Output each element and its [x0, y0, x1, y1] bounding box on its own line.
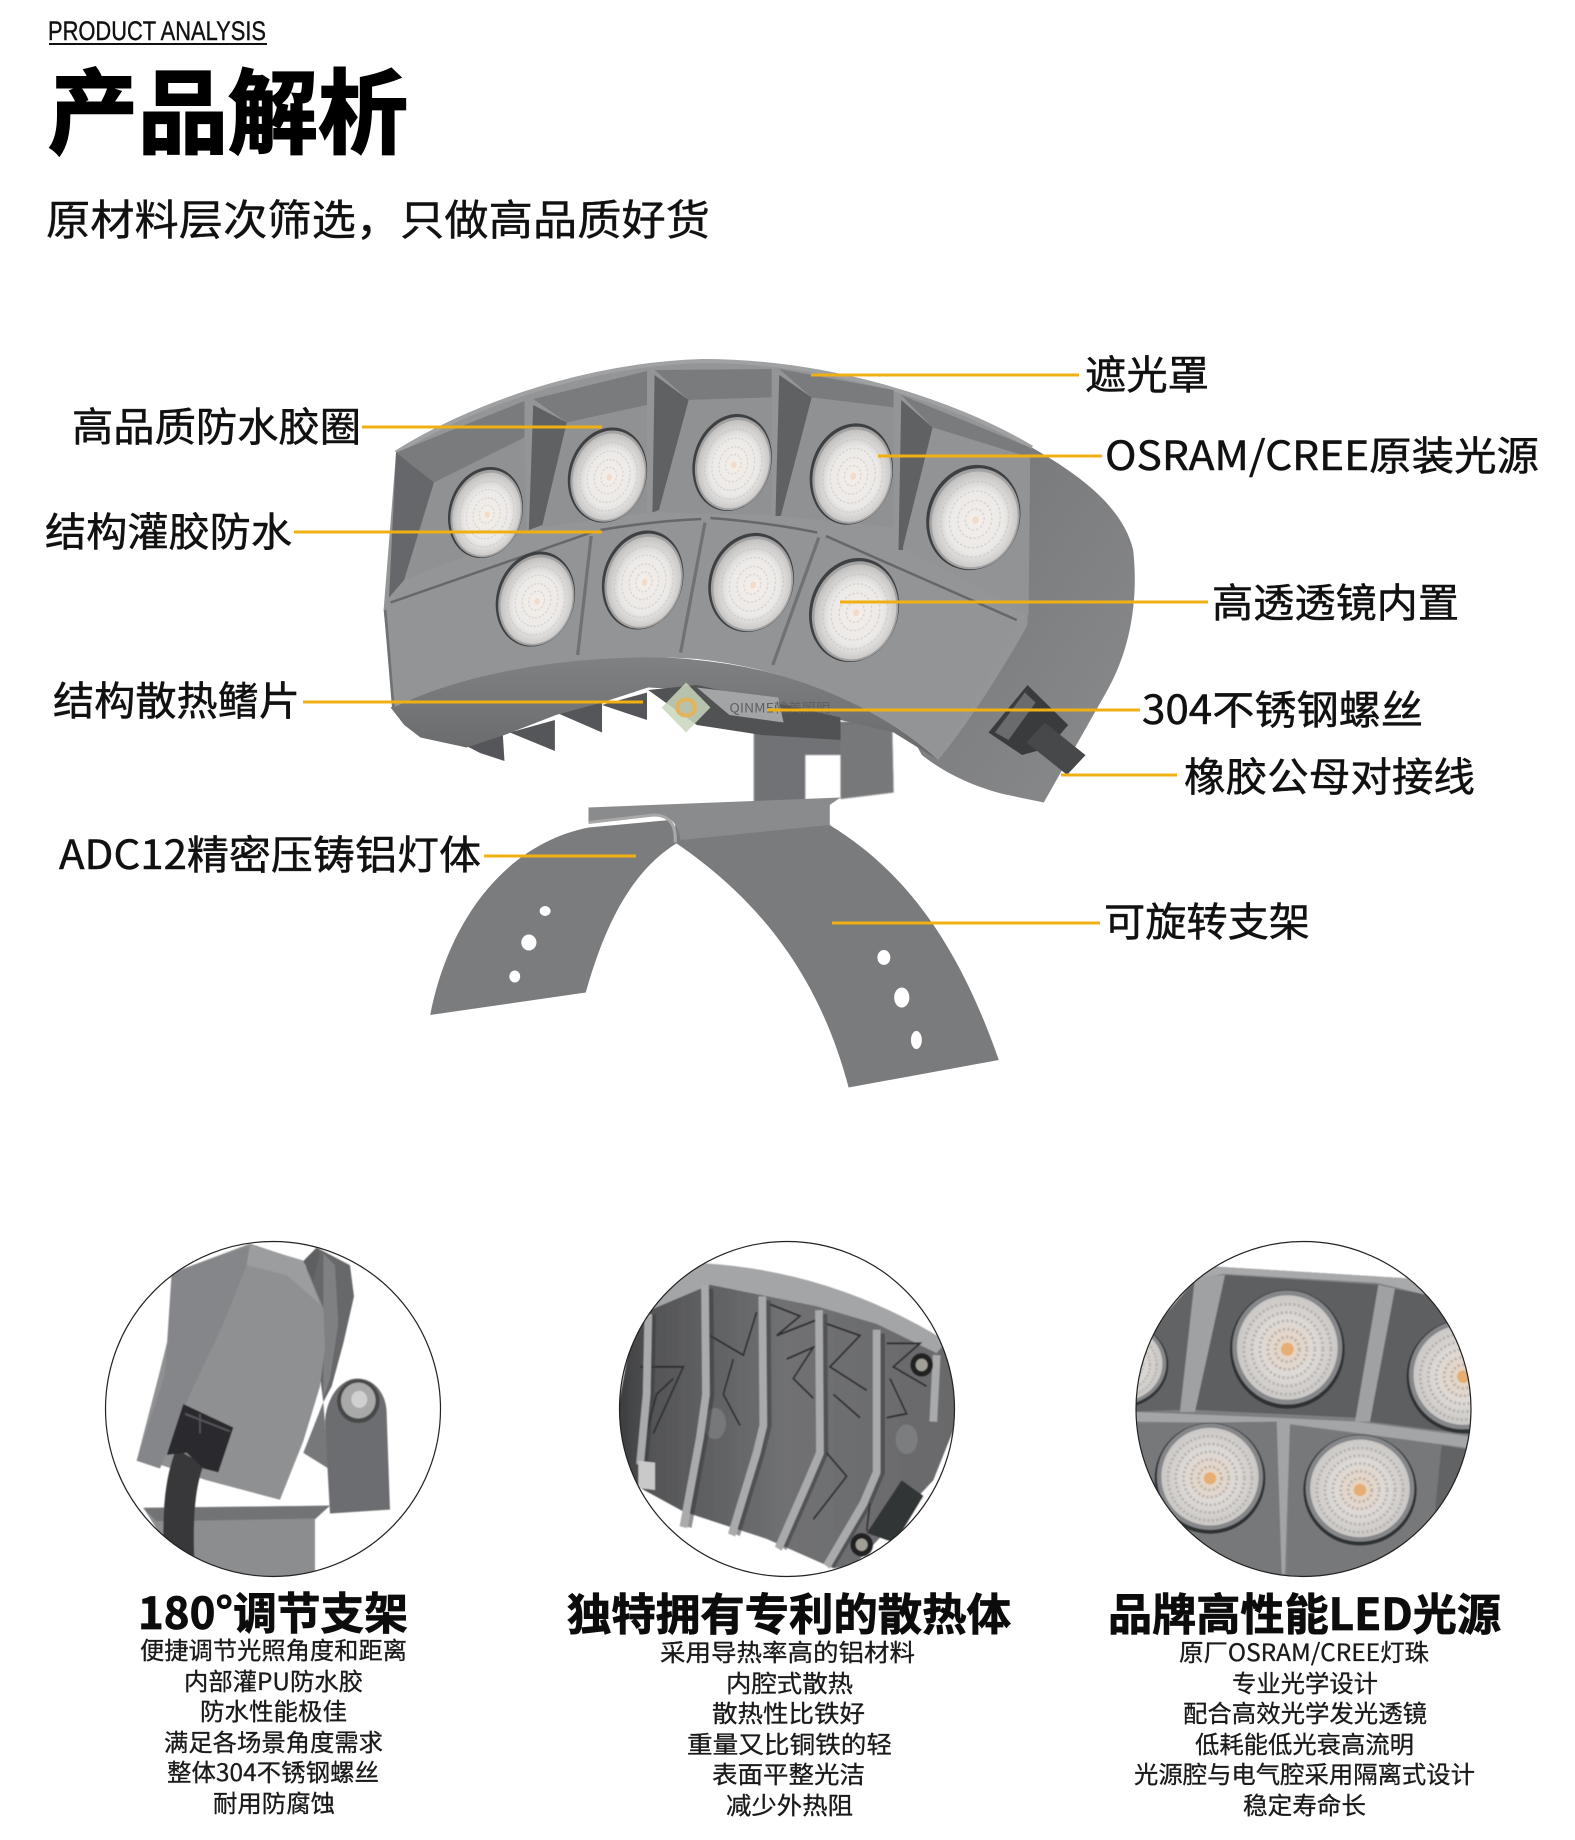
feature column 3 — [1108, 1579, 1501, 1821]
feature list 3: 原厂OSRAM/CREE灯珠 — [1179, 1633, 1429, 1668]
feature list 1 — [140, 1631, 407, 1819]
callout label: OSRAM/CREE原装光源: OSRAM/CREE原装光源 — [1105, 424, 1539, 482]
feature list 1: 内部灌PU防水胶 — [184, 1662, 363, 1697]
heading: 180°调节支架: 180°调节支架 — [138, 1578, 408, 1642]
feature list 1: 满足各场景角度需求 — [164, 1723, 383, 1758]
mount plate and watermark — [648, 682, 841, 740]
feature list 3: 稳定寿命长 — [1243, 1786, 1366, 1821]
feature list 2: 减少外热阻 — [726, 1786, 853, 1821]
lamp side housing — [892, 445, 1135, 802]
callout label: 结构散热鳍片: 结构散热鳍片 — [53, 669, 300, 727]
feature list 3: 配合高效光学发光透镜 — [1183, 1694, 1427, 1729]
mount plate and watermark: QINME翰美照明 — [729, 697, 830, 716]
feature list 1: 整体304不锈钢螺丝 — [167, 1753, 379, 1788]
callout label: 橡胶公母对接线: 橡胶公母对接线 — [1184, 745, 1475, 803]
callout label: 高透透镜内置: 高透透镜内置 — [1212, 571, 1459, 629]
compartment 1 — [389, 401, 526, 598]
lamp underside — [391, 657, 938, 760]
feature list 2 — [660, 1633, 915, 1821]
compartment 4 — [775, 369, 894, 528]
subtitle: 原材料层次筛选，只做高品质好货 — [46, 187, 710, 248]
heading: 独特拥有专利的散热体: 独特拥有专利的散热体 — [567, 1579, 1011, 1643]
compartment 3 — [652, 369, 772, 515]
lamp bracket upright — [754, 720, 894, 808]
callout label: 结构灌胶防水: 结构灌胶防水 — [45, 500, 292, 558]
eyebrow: PRODUCT ANALYSIS: PRODUCT ANALYSIS — [48, 16, 266, 46]
detail circle: bracket side view — [106, 1242, 440, 1582]
feature list 2: 重量又比铜铁的轻 — [687, 1725, 892, 1760]
callout lines — [294, 375, 1208, 923]
callout label: 高品质防水胶圈: 高品质防水胶圈 — [72, 395, 361, 453]
feature list 2: 散热性比铁好 — [712, 1694, 865, 1729]
feature list 3: 专业光学设计 — [1232, 1664, 1378, 1699]
lower band panel — [385, 518, 1017, 758]
cable connector — [988, 685, 1076, 765]
feature list 2: 内腔式散热 — [726, 1664, 853, 1699]
feature list 3 — [1134, 1633, 1475, 1821]
feature list 1: 便捷调节光照角度和距离 — [140, 1631, 407, 1666]
callout label: 遮光罩: 遮光罩 — [1085, 343, 1209, 401]
feature list 2: 表面平整光洁 — [712, 1755, 865, 1790]
heading: 品牌高性能LED光源: 品牌高性能LED光源 — [1108, 1579, 1501, 1643]
cooling fins — [467, 692, 647, 761]
title: 产品解析 — [48, 40, 408, 173]
feature list 3: 低耗能低光衰高流明 — [1195, 1725, 1414, 1760]
lenses top row — [439, 407, 1031, 578]
feature list 2: 采用导热率高的铝材料 — [660, 1633, 915, 1668]
feature list 3: 光源腔与电气腔采用隔离式设计 — [1134, 1755, 1475, 1790]
feature column 1 — [138, 1578, 408, 1819]
feature list 1: 耐用防腐蚀 — [213, 1784, 335, 1819]
feature column 2 — [567, 1579, 1011, 1821]
detail circle: heat sink fins — [613, 1242, 958, 1576]
lenses bottom row — [486, 523, 909, 670]
callout label: 可旋转支架: 可旋转支架 — [1104, 890, 1310, 948]
product illustration: lamp and bracket — [384, 361, 1135, 1088]
rotating bracket — [430, 798, 999, 1088]
callout label: 304不锈钢螺丝: 304不锈钢螺丝 — [1142, 678, 1423, 736]
detail circle: LED lenses — [1135, 1240, 1472, 1578]
compartment 2 — [529, 371, 647, 530]
compartment 5 — [899, 395, 1030, 615]
rim highlights — [396, 361, 1032, 452]
lamp front face — [384, 362, 1030, 760]
callout label: ADC12精密压铸铝灯体: ADC12精密压铸铝灯体 — [59, 823, 481, 881]
feature list 1: 防水性能极佳 — [200, 1692, 347, 1727]
